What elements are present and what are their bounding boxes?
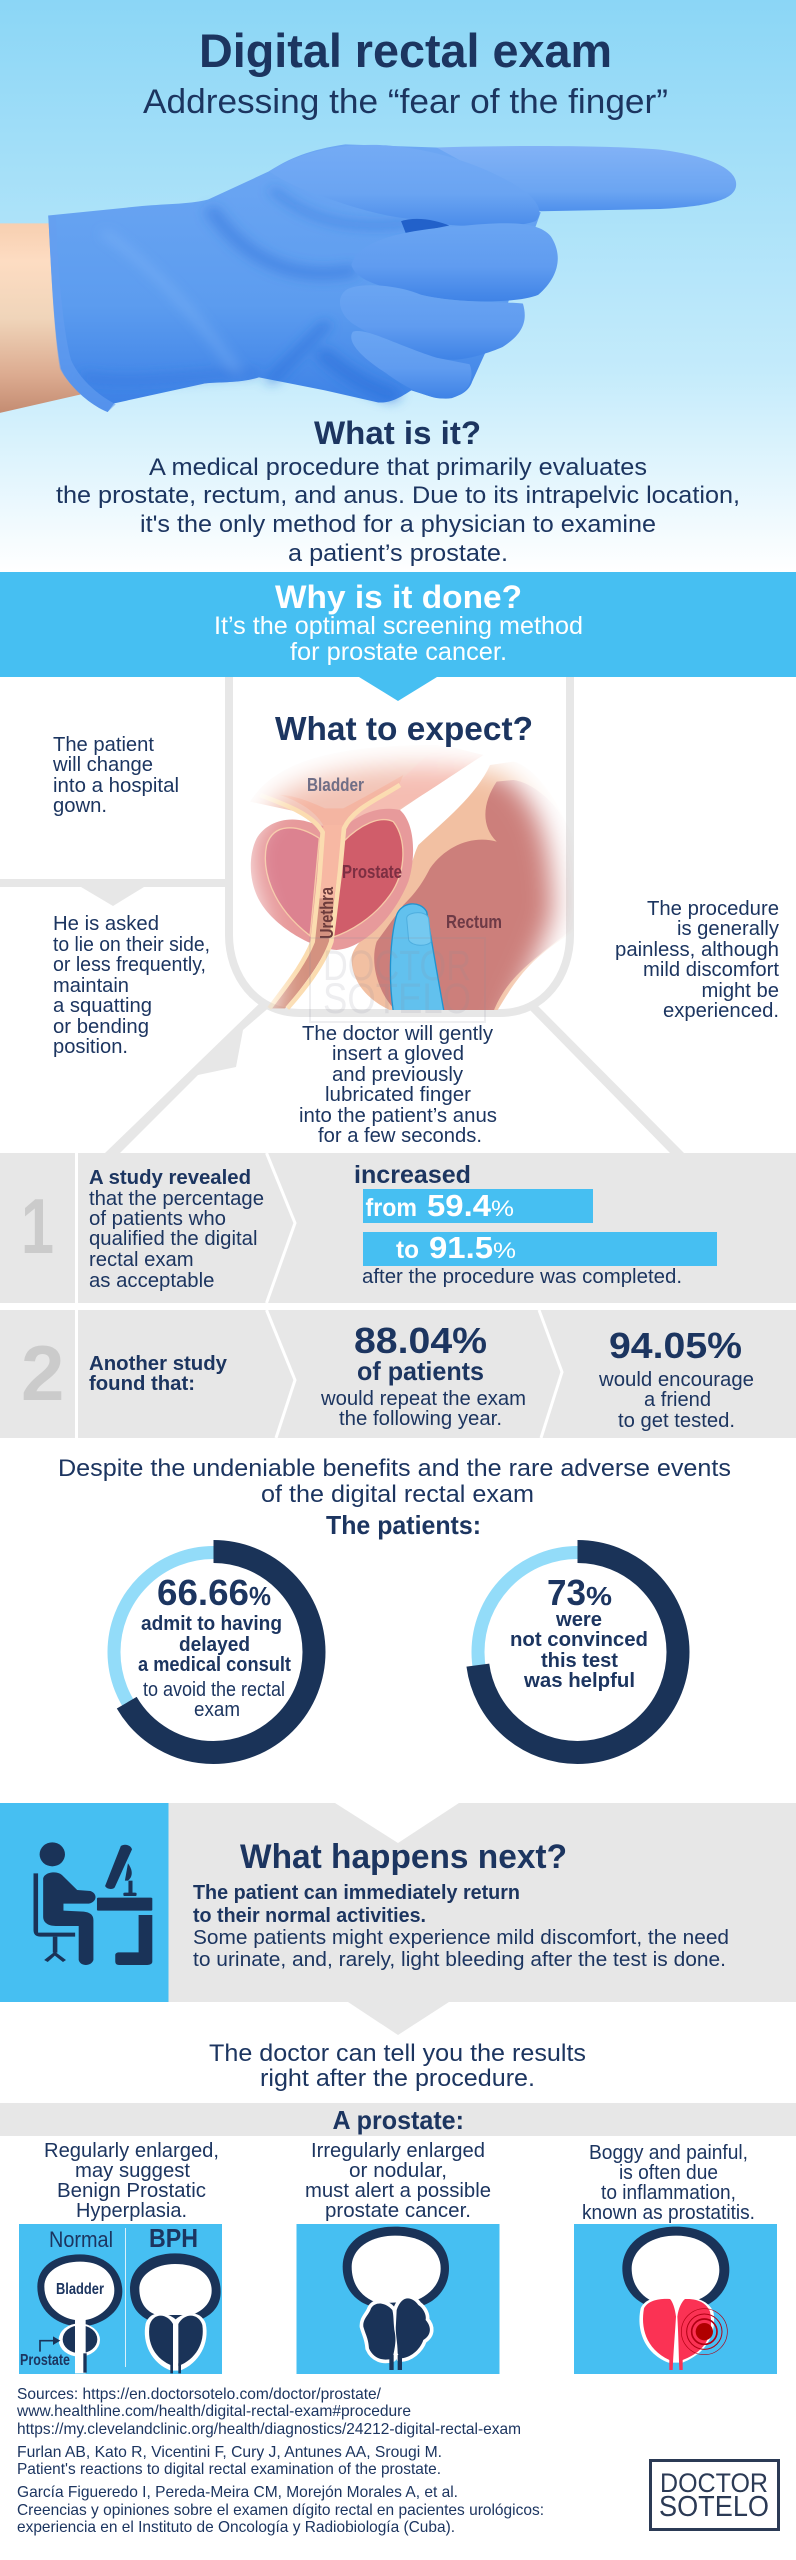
header gradient background: [0, 0, 796, 572]
heading: what is it: What is it?: [314, 415, 481, 451]
donut 1 text: admit to having: [141, 1613, 282, 1635]
text: despite the benefits: of the digital rectal exam: [261, 1481, 534, 1508]
panel: prostatitis diagram: [574, 2224, 777, 2374]
panel: what happens next: [0, 1803, 796, 2035]
donut 2 text: [510, 1572, 648, 1692]
donut 2 text: %: [586, 1581, 612, 1611]
stat: 88.04 percent: the following year.: [339, 1408, 502, 1430]
paragraph: what is it: it's the only method for a physician to examine: [140, 511, 656, 538]
column text: regularly enlarged: may suggest: [75, 2160, 190, 2182]
donut 2 text: 73: [547, 1572, 586, 1613]
column text: regularly enlarged: Regularly enlarged,: [44, 2140, 219, 2162]
stat: 94.05 percent: a friend: [644, 1389, 711, 1411]
illustration labels: Prostate: [342, 862, 402, 882]
increased label: increased: [354, 1161, 471, 1189]
donut chart: 73 percent: [477, 1552, 678, 1752]
number 1: 1: [21, 1182, 54, 1270]
recovery text: [193, 1882, 729, 1971]
donut 1 text: 66.66: [157, 1572, 249, 1613]
bar: 59.4 percent: 59.4: [427, 1188, 492, 1223]
panel: study 1: [0, 1153, 796, 1303]
donut 1 text: a medical consult: [138, 1654, 291, 1676]
text: doctor insertion: for a few seconds.: [318, 1125, 482, 1147]
banner arrow: [359, 677, 437, 701]
text: results: The doctor can tell you the results: [209, 2040, 586, 2067]
column text: irregularly enlarged: prostate cancer.: [325, 2200, 471, 2222]
paragraph: what is it: the prostate, rectum, and anus. Due to its intrapelvic location,: [56, 482, 740, 509]
study 1 description: of patients who: [89, 1208, 226, 1230]
watermark: [310, 938, 485, 1023]
watermark: SOTELO: [323, 975, 471, 1023]
connector: lower right diagonal: [526, 1003, 684, 1153]
donut 1 text: delayed: [179, 1634, 250, 1656]
banner text: It’s the optimal screening method: [214, 612, 583, 640]
paragraph: what is it: A medical procedure that primarily evaluates: [149, 454, 647, 481]
icon: person at desk: [34, 1842, 152, 1965]
sources: www.healthline.com/health/digital-rectal-exam#procedure: [16, 2403, 411, 2420]
illustration labels: Bladder: [307, 775, 364, 795]
bar: 91.5 percent: %: [493, 1238, 516, 1263]
panel: normal vs BPH diagram: [19, 2223, 222, 2374]
sources: [16, 2386, 544, 2536]
column text: irregularly enlarged: [305, 2140, 491, 2222]
text: painless: is generally: [677, 918, 779, 940]
study 2 description: Another study: [89, 1353, 228, 1375]
column text: boggy and painful: Boggy and painful,: [589, 2142, 748, 2164]
column text: irregularly enlarged: must alert a possible: [305, 2180, 491, 2202]
recovery text: to their normal activities.: [193, 1905, 426, 1927]
column text: irregularly enlarged: or nodular,: [349, 2160, 447, 2182]
logo: Doctor Sotelo: DOCTOR: [660, 2468, 768, 2498]
text: position: or less frequently,: [53, 954, 206, 976]
text: doctor insertion: lubricated finger: [325, 1084, 471, 1106]
illustration labels: Rectum: [446, 912, 502, 932]
text: hospital gown: will change: [52, 754, 153, 776]
column text: irregularly enlarged: Irregularly enlarged: [311, 2140, 485, 2162]
banner: why is it done: [0, 572, 796, 701]
connector: lower left diagonal: [105, 1000, 272, 1153]
bar: 59.4 percent: [363, 1188, 593, 1223]
subtitle: Addressing the “fear of the finger”: [143, 83, 668, 121]
bar: 91.5 percent: 91.5: [429, 1230, 493, 1265]
text: doctor insertion: into the patient’s anus: [299, 1105, 497, 1127]
text: hospital gown: gown.: [53, 795, 107, 817]
text: doctor insertion: insert a gloved: [332, 1043, 464, 1065]
text: position: to lie on their side,: [53, 934, 210, 956]
number 2: 2: [21, 1329, 64, 1417]
recovery text: The patient can immediately return: [193, 1882, 520, 1904]
column text: boggy and painful: to inflammation,: [601, 2182, 736, 2204]
connector: left divider with arrow: [0, 879, 225, 906]
illustration labels: Urethra: [317, 886, 337, 939]
text: despite the benefits: Despite the undeniable benefits and the rare adverse events: [58, 1455, 731, 1482]
heading: the patients: The patients:: [326, 1510, 481, 1540]
banner text: [214, 612, 583, 666]
study 2 description: [89, 1353, 228, 1395]
donut 2 text: this test: [541, 1650, 618, 1672]
donut 1 text: exam: [194, 1699, 240, 1721]
text: despite the benefits: [58, 1455, 731, 1508]
donut 2 text: not convinced: [510, 1629, 648, 1651]
text: painless: The procedure: [647, 898, 779, 920]
heading: what to expect: What to expect?: [275, 710, 533, 747]
labels: [20, 2223, 198, 2369]
labels: Normal: [49, 2227, 113, 2252]
text: results: right after the procedure.: [260, 2065, 535, 2092]
column text: regularly enlarged: Benign Prostatic: [57, 2180, 206, 2202]
text: painless: mild discomfort: [643, 959, 779, 981]
text: painless: [615, 898, 779, 1022]
text: painless: painless, although: [615, 939, 779, 961]
heading: what happens next: What happens next?: [240, 1838, 567, 1876]
study 1 description: that the percentage: [89, 1188, 264, 1210]
donut 1 text: %: [249, 1581, 271, 1611]
stat: 88.04 percent: would repeat the exam: [320, 1388, 526, 1410]
donut chart: 66.66 percent: [113, 1552, 314, 1752]
column text: boggy and painful: known as prostatitis.: [582, 2202, 755, 2224]
text: hospital gown: The patient: [53, 734, 154, 756]
frame around what to expect: [229, 677, 570, 1013]
donut 2 text: were: [555, 1609, 602, 1631]
stat: 88.04 percent: [320, 1320, 526, 1430]
stat: 88.04 percent: of patients: [357, 1356, 484, 1386]
labels: BPH: [149, 2223, 198, 2253]
recovery text: to urinate, and, rarely, light bleeding after the test is done.: [193, 1949, 726, 1971]
sources: Patient's reactions to digital rectal examination of the prostate.: [17, 2461, 441, 2478]
study 1 description: qualified the digital: [89, 1228, 258, 1250]
bar: 59.4 percent: from: [366, 1194, 417, 1222]
sources: García Figueredo I, Pereda-Meira CM, Morejón Morales A, et al.: [17, 2484, 458, 2501]
sources: experiencia en el Instituto de Oncología y Radiobiología (Cuba).: [17, 2519, 455, 2536]
column text: boggy and painful: [582, 2142, 755, 2224]
banner heading: Why is it done?: [275, 579, 522, 615]
text: painless: might be: [702, 980, 779, 1002]
bar: 59.4 percent: %: [491, 1196, 514, 1221]
text: position: maintain: [53, 975, 129, 997]
title: Digital rectal exam: [199, 24, 612, 77]
text: position: position.: [53, 1036, 128, 1058]
donut 1 text: [138, 1572, 291, 1721]
text: results: [209, 2040, 586, 2092]
study 1 description: A study revealed: [89, 1167, 251, 1189]
bar: 91.5 percent: to: [396, 1236, 419, 1264]
illustration: prostate anatomy with finger: [250, 745, 573, 1012]
bar: 91.5 percent: [363, 1230, 717, 1266]
study 1 description: [89, 1167, 264, 1292]
stat: 94.05 percent: would encourage: [598, 1369, 754, 1391]
heading band: a prostate: A prostate:: [332, 2105, 464, 2135]
text: position: He is asked: [53, 913, 159, 935]
column text: boggy and painful: is often due: [619, 2162, 718, 2184]
column text: regularly enlarged: Hyperplasia.: [76, 2200, 187, 2222]
study 1 description: rectal exam: [89, 1249, 194, 1271]
sources: https://my.clevelandclinic.org/health/diagnostics/24212-digital-rectal-exam: [17, 2421, 521, 2438]
sources: Creencias y opiniones sobre el examen dígito rectal en pacientes urológicos:: [17, 2502, 544, 2519]
after procedure note: after the procedure was completed.: [362, 1266, 682, 1288]
text: doctor insertion: and previously: [332, 1064, 463, 1086]
text: painless: experienced.: [663, 1000, 779, 1022]
labels: Prostate: [20, 2352, 70, 2369]
stat: 94.05 percent: to get tested.: [618, 1410, 735, 1432]
logo: Doctor Sotelo: SOTELO: [659, 2491, 769, 2523]
text: position: or bending: [53, 1016, 149, 1038]
section: what is it: [56, 415, 740, 567]
stat: 94.05 percent: 94.05%: [609, 1325, 742, 1366]
recovery text: Some patients might experience mild discomfort, the need: [193, 1927, 729, 1949]
labels: Bladder: [56, 2281, 104, 2298]
text: hospital gown: into a hospital: [53, 775, 179, 797]
heading band: a prostate: [0, 2103, 796, 2136]
study 1 description: as acceptable: [89, 1270, 214, 1292]
text: doctor insertion: The doctor will gently: [302, 1023, 493, 1045]
text: hospital gown: [52, 734, 179, 817]
illustration: gloved pointing hand: [0, 144, 736, 413]
donut 2 text: was helpful: [523, 1670, 635, 1692]
inflammation target: [681, 2309, 727, 2355]
column text: regularly enlarged: [44, 2140, 219, 2222]
sources: Sources: https://en.doctorsotelo.com/doctor/prostate/: [17, 2386, 382, 2403]
stat: 88.04 percent: 88.04%: [354, 1320, 487, 1361]
donut 1 text: to avoid the rectal: [143, 1679, 285, 1701]
stat: 94.05 percent: [598, 1325, 754, 1432]
banner text: for prostate cancer.: [290, 638, 507, 666]
panel: irregular prostate diagram: [296, 2224, 500, 2374]
watermark: DOCTOR: [323, 942, 471, 990]
text: doctor insertion: [299, 1023, 497, 1147]
paragraph: what is it: a patient’s prostate.: [288, 540, 508, 567]
text: position: a squatting: [53, 995, 152, 1017]
panel: study 2: [0, 1310, 796, 1438]
study 2 description: found that:: [89, 1373, 195, 1395]
logo: Doctor Sotelo: [650, 2460, 778, 2530]
illustration labels: [307, 775, 502, 939]
paragraph: what is it: [56, 454, 740, 567]
sources: Furlan AB, Kato R, Vicentini F, Cury J, Antunes AA, Srougi M.: [17, 2444, 442, 2461]
text: position: [53, 913, 210, 1058]
